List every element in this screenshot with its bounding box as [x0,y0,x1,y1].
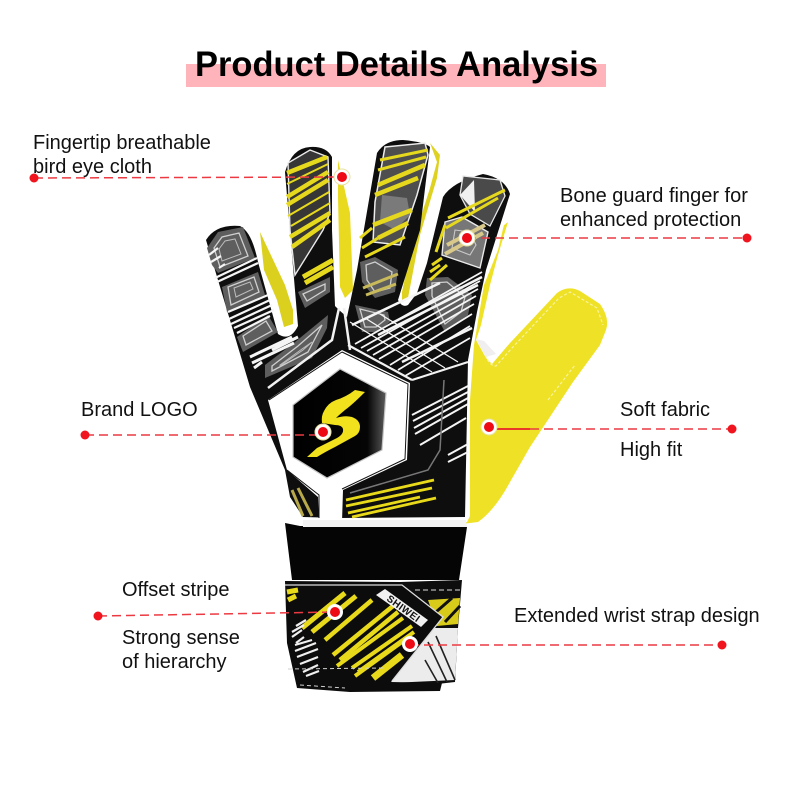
callout: fingertip: bird eye cloth [33,156,152,178]
brand tag [376,589,428,627]
right strap section [385,580,462,690]
yellow diagonal stripes [287,590,414,678]
wrist strap [285,520,467,692]
callout: brand logo: Brand LOGO [81,399,198,421]
glove illustration [201,137,607,524]
yellow finger stripes [287,150,505,295]
title: Product Details Analysis [195,45,598,84]
palm black panels [206,140,510,518]
finger gussets [260,232,293,327]
callout: offset stripe [94,579,343,673]
finger pads [207,143,505,378]
elastic band [285,523,467,580]
brand tag: SHIWEI [384,594,422,625]
callout: fingertip: Fingertip breathable [33,132,211,154]
callout: soft fabric: Soft fabric [620,399,710,421]
main strap panel [285,581,443,692]
hexagon logo: yellow S on black [293,369,386,478]
callout: offset stripe: Offset stripe [122,579,229,601]
white hexagon frame [268,350,410,522]
palm bottom stripes [346,480,436,517]
callout: fingertip [30,132,350,185]
white streak pattern [209,248,482,462]
callout: offset stripe: of hierarchy [122,651,226,673]
callout: soft fabric [481,399,736,461]
callout: brand logo [80,399,331,440]
white border lines on palm [268,308,350,388]
glove white base [201,137,511,522]
callout: bone guard [459,185,752,246]
thumb: yellow fabric [462,222,607,524]
callout: wrist strap: Extended wrist strap design [514,605,760,627]
callout: bone guard: enhanced protection [560,209,741,231]
callout: bone guard: Bone guard finger for [560,185,748,207]
white hatch blocks [292,620,319,676]
callout: offset stripe: Strong sense [122,627,240,649]
callout: soft fabric: High fit [620,439,683,461]
callout: wrist strap [402,605,760,652]
